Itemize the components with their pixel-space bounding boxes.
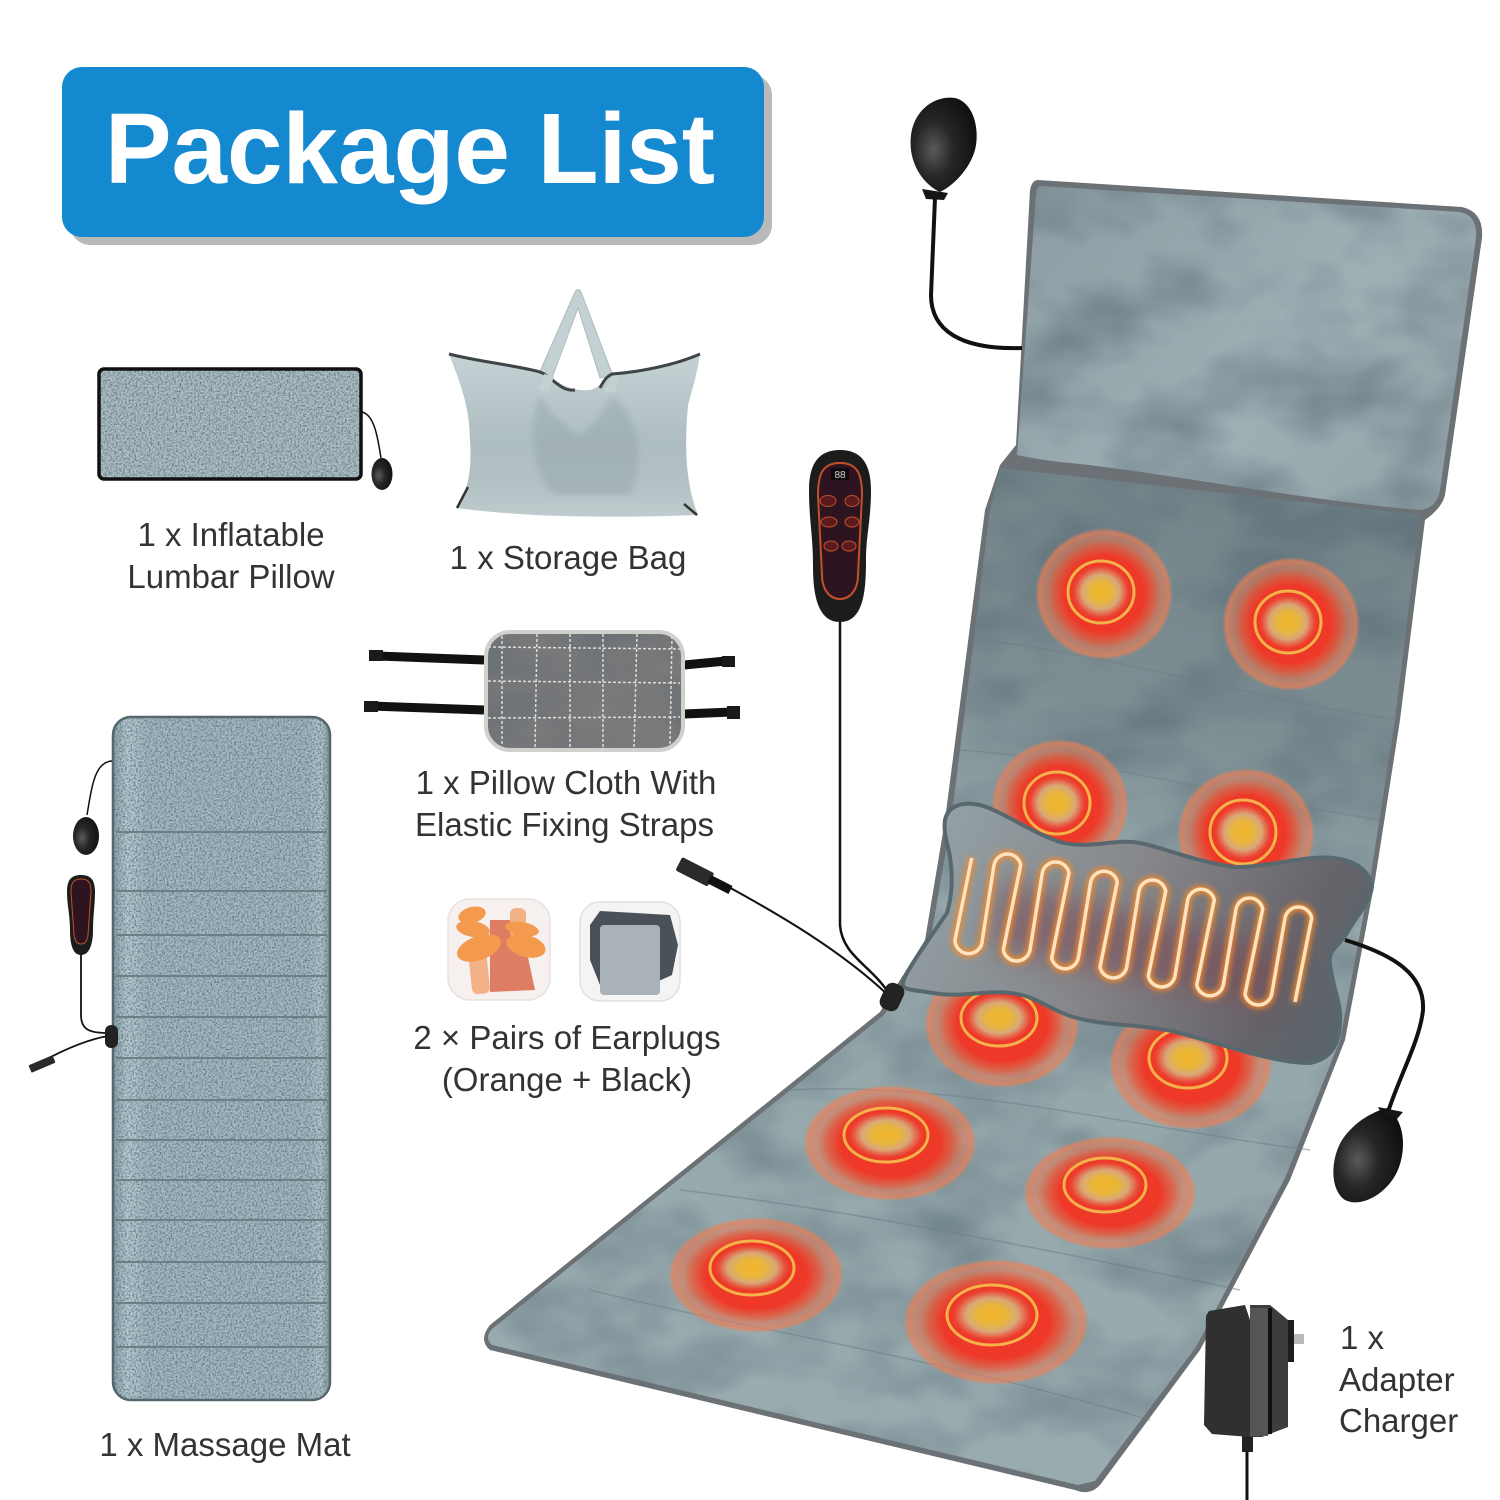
banner shadow <box>70 75 772 245</box>
bag corners <box>457 487 697 515</box>
line 2: Elastic Fixing Straps <box>415 806 714 843</box>
heating coil glow <box>955 854 1312 1005</box>
label: inflatable lumbar pillow <box>127 516 335 595</box>
handle straps over bag <box>538 374 618 392</box>
remote cord <box>840 622 888 992</box>
prong <box>1294 1334 1304 1344</box>
line 3: Charger <box>1339 1402 1458 1439</box>
pillow pump <box>372 458 392 490</box>
heat spot 3 <box>991 739 1129 871</box>
heat spot 7 <box>803 1085 977 1201</box>
icon: top air pump with hose <box>911 98 1022 348</box>
icon: orange earplugs box <box>448 899 550 1000</box>
icon: black earplugs box <box>580 902 680 1001</box>
line 1: 2 × Pairs of Earplugs <box>413 1019 721 1056</box>
cloth stitching <box>488 634 680 750</box>
mat pump <box>73 817 99 855</box>
display <box>831 468 849 480</box>
line 2: (Orange + Black) <box>442 1061 692 1098</box>
strain relief <box>1242 1436 1253 1452</box>
bag shadow folds <box>533 395 638 495</box>
mat junction <box>105 1025 118 1048</box>
illustration: pillow cloth with straps <box>364 632 740 750</box>
heat spot 10 <box>903 1259 1089 1385</box>
mat cords <box>45 955 108 1060</box>
pillow pump hose <box>362 412 381 458</box>
line 1: 1 x Inflatable <box>137 516 325 553</box>
line 1: 1 x <box>1340 1319 1385 1356</box>
plug flanges <box>453 904 548 967</box>
adapter back panel <box>1250 1305 1288 1437</box>
junction box <box>877 980 907 1014</box>
strap buckles <box>364 650 740 719</box>
heat spot 8 <box>1023 1136 1197 1250</box>
remote buttons <box>820 496 859 551</box>
hose <box>931 198 1022 348</box>
case <box>448 899 550 1000</box>
dark plugs <box>590 911 678 985</box>
illustration: lumbar pillow with heating coil <box>903 804 1372 1063</box>
label: earplugs <box>413 1019 721 1098</box>
mat remote panel <box>71 879 91 944</box>
illustration: folded massage mat <box>28 717 330 1400</box>
bulb <box>911 98 977 192</box>
adapter groove <box>1268 1308 1272 1434</box>
straps <box>372 656 732 714</box>
label: pillow cloth <box>415 764 716 843</box>
mat remote <box>67 875 95 955</box>
label: massage mat: 1 x Massage Mat <box>99 1426 351 1463</box>
plug base <box>1286 1320 1294 1362</box>
label: storage bag: 1 x Storage Bag <box>450 539 686 576</box>
plug stems <box>468 908 526 995</box>
handles <box>538 290 613 378</box>
illustration: assembled massage mat <box>484 180 1482 1492</box>
banner background <box>62 67 764 237</box>
pillow border <box>99 369 361 479</box>
cover label <box>600 925 660 995</box>
mat body <box>488 468 1420 1485</box>
mat power connector <box>28 1055 56 1073</box>
panel: title banner <box>62 67 772 245</box>
heat spot 2 <box>1222 557 1360 691</box>
valve <box>1378 1107 1403 1119</box>
heat spot 4 <box>1177 768 1315 900</box>
heating coil <box>955 854 1312 1005</box>
pillow surface <box>99 369 361 479</box>
line 1: 1 x Pillow Cloth With <box>416 764 716 801</box>
bulb <box>1333 1108 1403 1202</box>
icon: adapter charger <box>1204 1305 1304 1500</box>
cloth border <box>486 632 683 750</box>
display digits: 88 <box>834 470 846 481</box>
illustration: inflatable lumbar pillow <box>99 369 392 490</box>
line 2: Adapter <box>1339 1361 1455 1398</box>
bag body <box>449 354 700 517</box>
mat surface <box>113 717 330 1400</box>
hose <box>1345 940 1423 1112</box>
cord <box>490 920 535 992</box>
heat spot 5 <box>924 960 1080 1088</box>
icon: remote control <box>809 450 871 622</box>
pillow edge <box>903 804 1372 1063</box>
case <box>580 902 680 1001</box>
adapter front <box>1204 1305 1250 1437</box>
title: Package List <box>105 93 715 205</box>
label: adapter charger <box>1339 1319 1458 1439</box>
cloth body <box>486 632 683 750</box>
head flap <box>1017 186 1476 510</box>
mat seams <box>116 832 327 1347</box>
bag top seam <box>449 354 700 390</box>
mat seam lines <box>590 640 1400 1420</box>
remote panel <box>818 463 862 599</box>
heat spot 1 <box>1035 528 1173 660</box>
heat spot 9 <box>668 1217 844 1333</box>
adapter mid panel <box>1250 1308 1268 1436</box>
heat spot 6 <box>1109 998 1273 1130</box>
cord <box>1246 1436 1248 1500</box>
mat border <box>113 717 330 1400</box>
warm glow inside pillow <box>990 880 1290 1010</box>
power cord <box>725 885 888 995</box>
line 2: Lumbar Pillow <box>127 558 335 595</box>
power connector <box>675 857 734 897</box>
remote body <box>809 450 871 622</box>
illustration: storage bag <box>449 290 700 517</box>
icon: cables and junction on main mat <box>675 622 907 1014</box>
mat pump hose <box>87 761 112 815</box>
valve <box>922 189 948 200</box>
mat outer edge <box>484 180 1482 1492</box>
icon: right air pump with hose <box>1333 940 1423 1202</box>
